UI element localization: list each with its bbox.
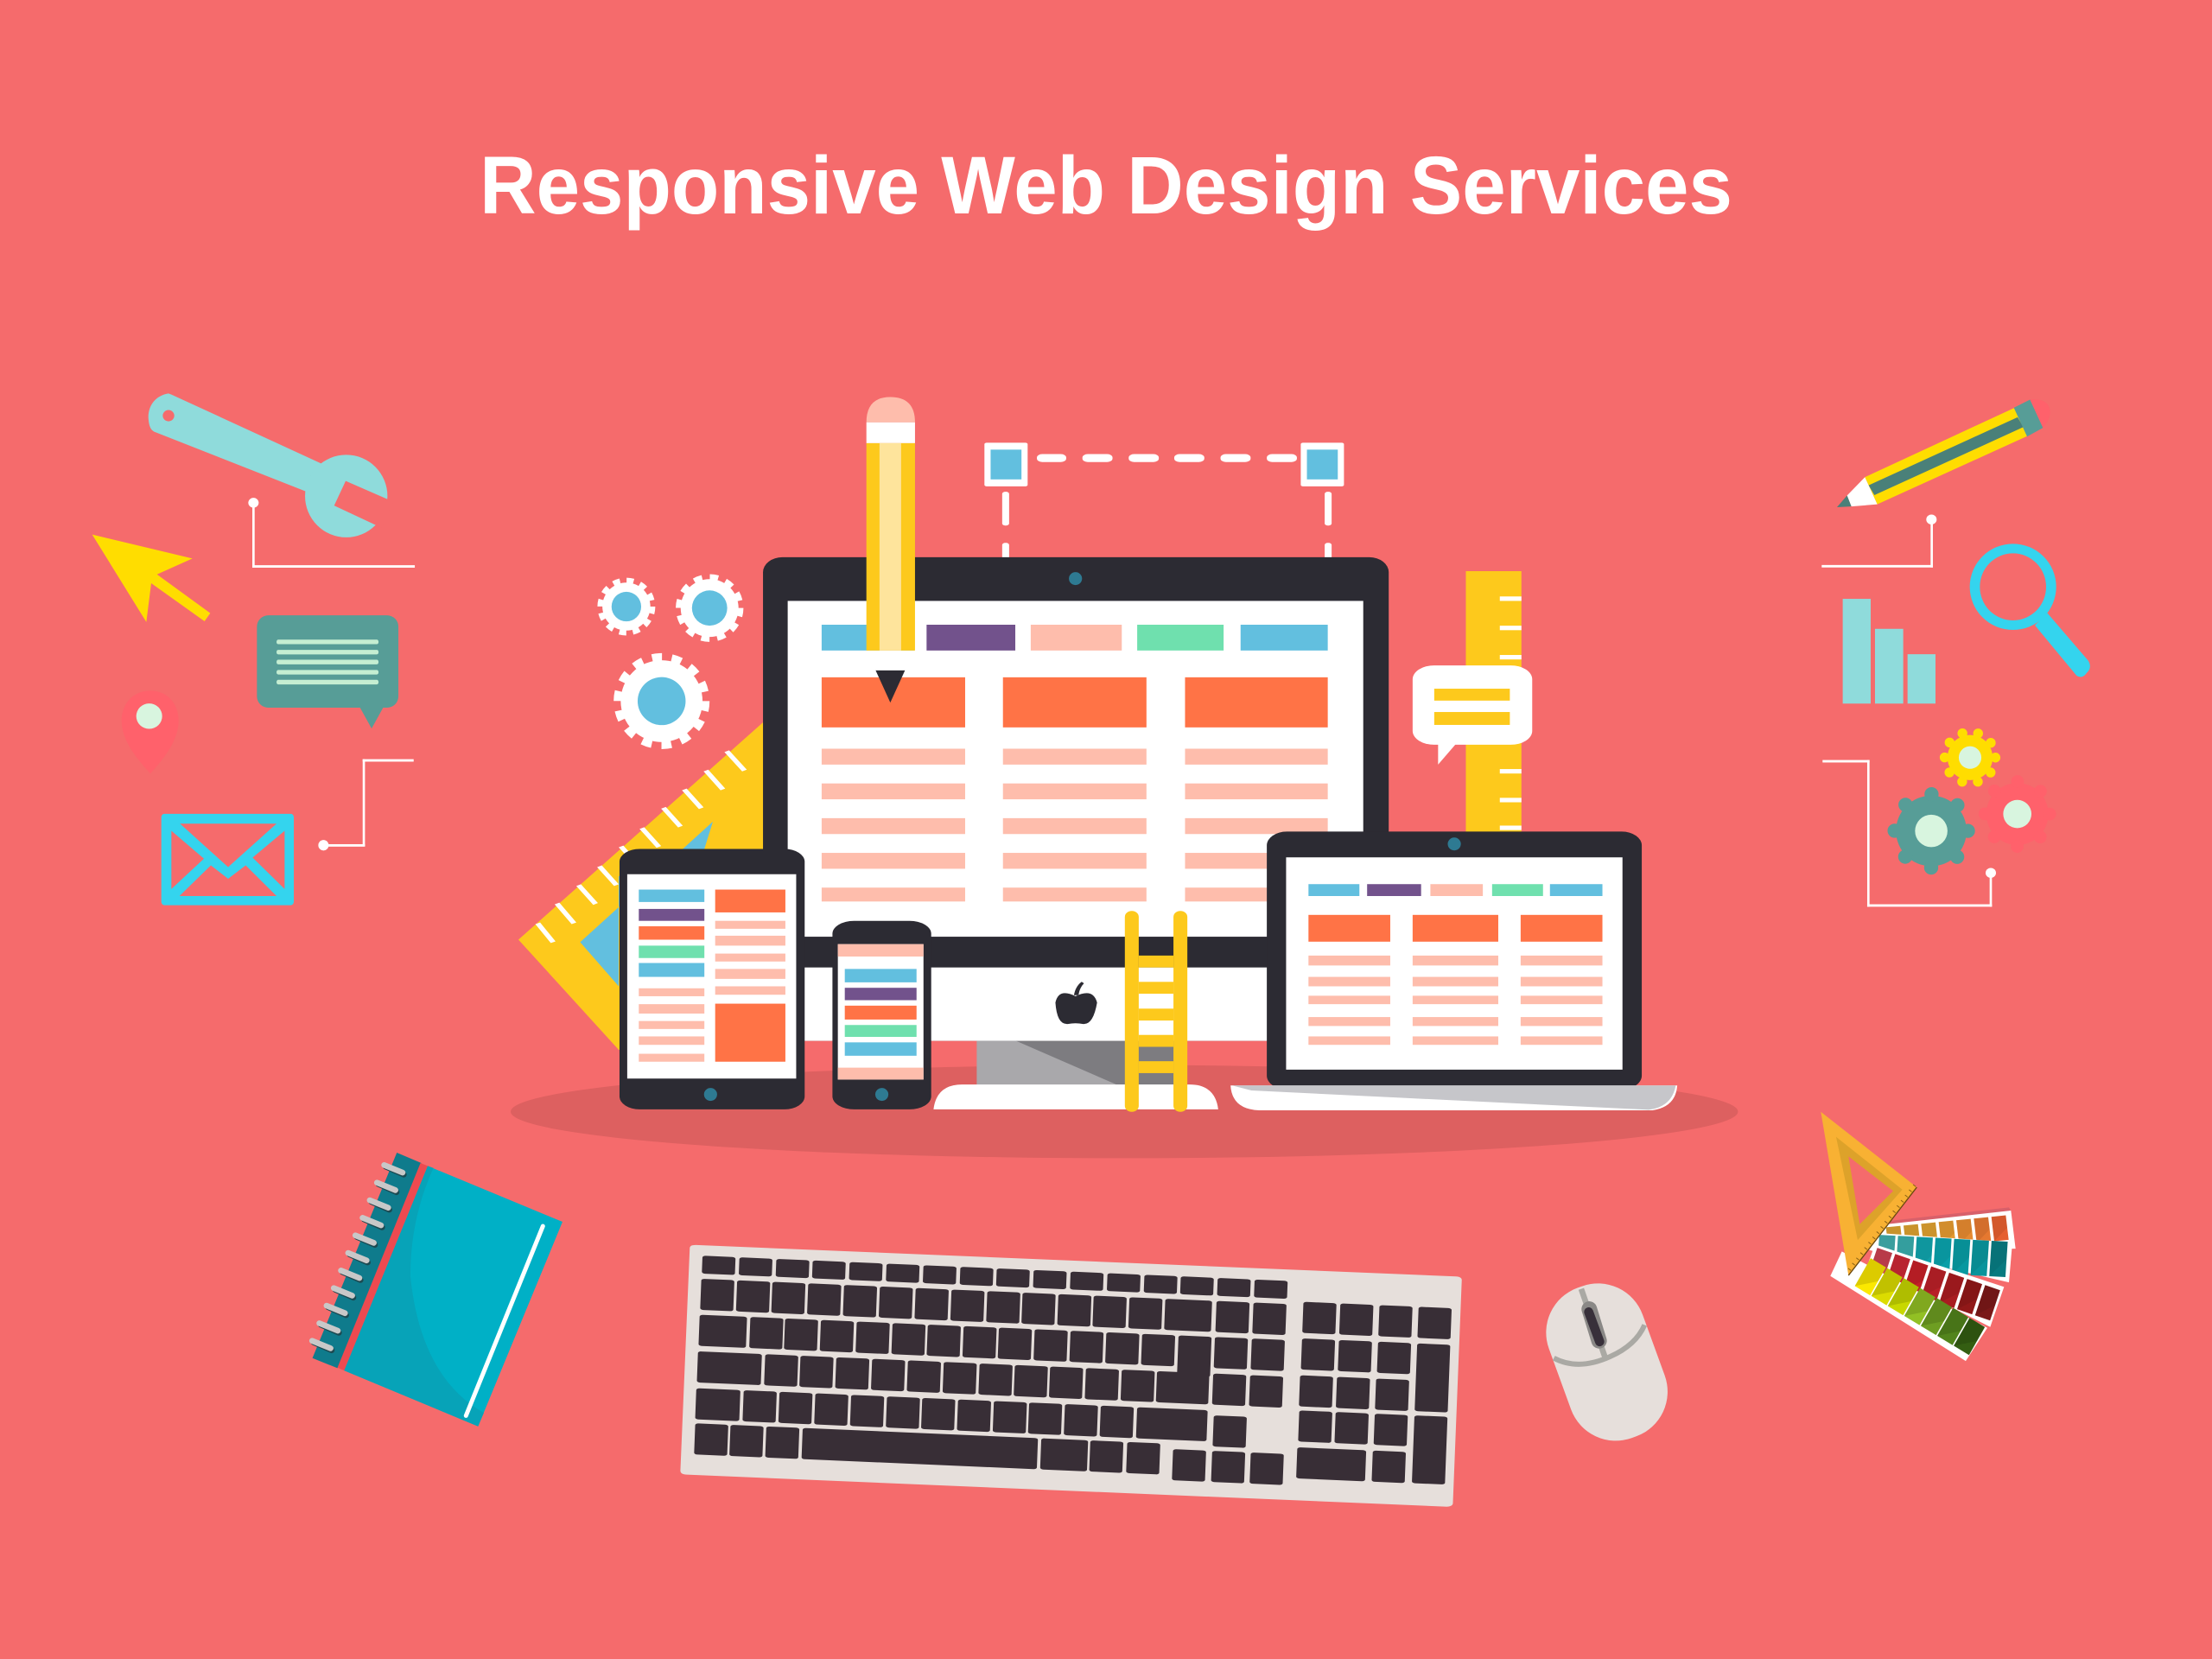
tall pencil: [867, 397, 915, 702]
icon: red gear: [1985, 781, 2050, 847]
desktop monitor: [763, 557, 1389, 1041]
keyboard: [680, 1245, 1462, 1507]
icon: white gear medium: [678, 577, 741, 639]
icon: bar chart: [1843, 599, 1936, 703]
palette card: red: [1867, 1244, 2004, 1327]
tablet right column: [715, 890, 785, 1062]
title: Responsive Web Design Services: [480, 140, 1732, 232]
color palette and set square: [1821, 1112, 2016, 1361]
icon: teal gear: [1895, 794, 1968, 868]
icon: apple logo: [1055, 982, 1097, 1024]
vertical ruler: [1465, 571, 1522, 834]
mouse: [1533, 1270, 1681, 1454]
ground shadow: [511, 1065, 1738, 1158]
laptop tabs: [1308, 884, 1603, 896]
right icons: [1821, 399, 2090, 906]
icon: white gear small: [601, 581, 652, 632]
tablet: [620, 849, 804, 1109]
connector: gears: [1822, 760, 1996, 906]
device scene: [518, 397, 1677, 1112]
phone: [832, 921, 931, 1109]
icon: cursor arrow: [92, 535, 210, 622]
connector: wrench: [248, 498, 415, 568]
icon: white gear large: [618, 658, 705, 745]
connector: envelope: [318, 760, 414, 850]
laptop content blocks: [1308, 915, 1603, 942]
monitor text rows: [822, 749, 1328, 901]
monitor tabs: [822, 625, 1328, 651]
monitor content blocks: [822, 677, 1328, 728]
notebook: [312, 1153, 563, 1427]
monitor stand: [933, 1038, 1218, 1109]
ladder: [1125, 911, 1187, 1112]
tablet left column: [639, 890, 704, 1062]
palette card: teal: [1869, 1233, 2012, 1282]
laptop base: [1230, 1085, 1677, 1110]
connector: pencil: [1821, 515, 1936, 568]
palette card: orange: [1860, 1207, 2016, 1252]
icon: magnifier: [1970, 543, 2090, 677]
left icons: [92, 393, 415, 906]
laptop: [1230, 831, 1677, 1110]
icon: pencil: [1837, 399, 2050, 507]
notebook spiral: [312, 1165, 404, 1351]
icon: yellow gear: [1945, 732, 1995, 783]
palette card: green: [1830, 1251, 1987, 1361]
laptop text rows: [1308, 956, 1603, 1045]
icon: map pin: [122, 690, 179, 773]
icon: wrench: [149, 393, 393, 537]
icon: speech bubble: [257, 615, 398, 728]
chat bubble: [1413, 665, 1532, 765]
set square: [1821, 1112, 1916, 1275]
triangular ruler: [518, 714, 773, 1050]
selection frame: [984, 442, 1344, 560]
icon: envelope: [162, 814, 294, 906]
keyboard keys: [694, 1255, 1452, 1492]
